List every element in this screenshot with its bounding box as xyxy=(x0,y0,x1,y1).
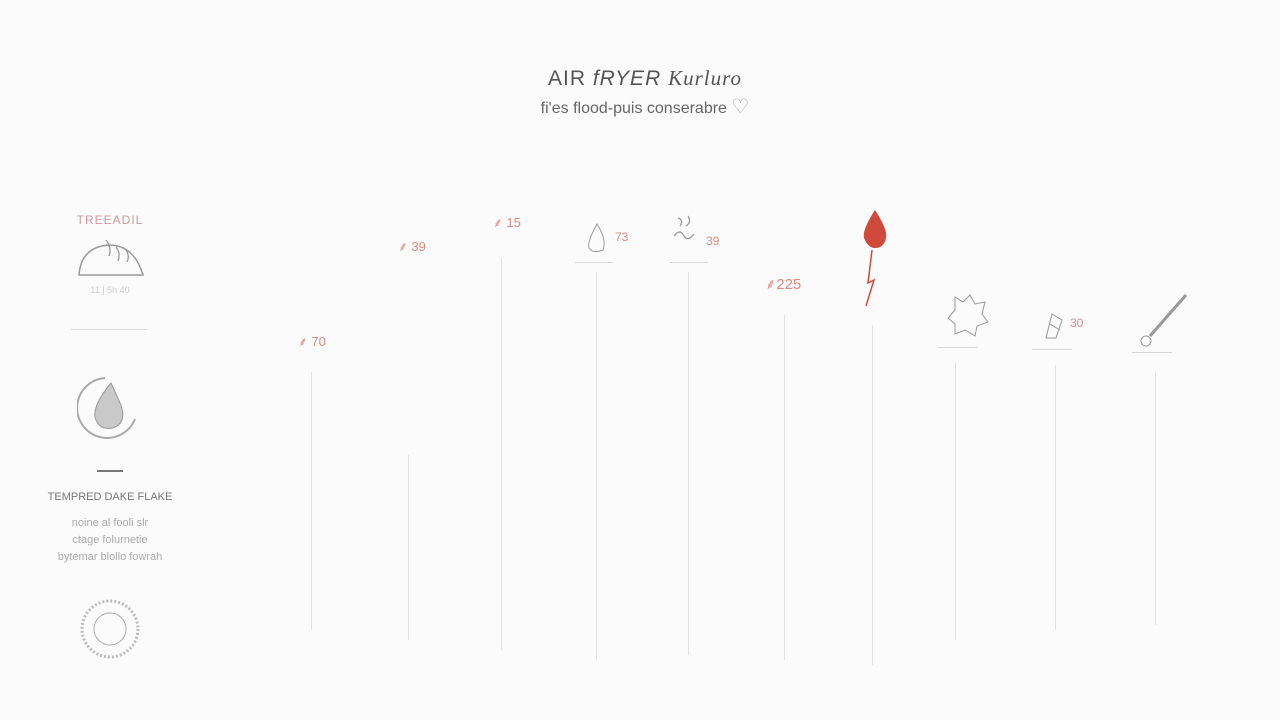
col 6: ⸙225 xyxy=(765,276,801,293)
col 5 xyxy=(674,216,719,248)
col 3: ⸙ 15 xyxy=(493,215,521,230)
left panel xyxy=(48,213,172,658)
caption small: 11 | 5h 40 xyxy=(90,285,130,295)
col 7: red drop xyxy=(864,210,886,306)
col 4: 73 xyxy=(615,230,628,244)
col 2: ⸙ 39 xyxy=(398,239,426,254)
icon: bread xyxy=(78,240,144,276)
col 10: brush xyxy=(1140,294,1187,346)
col 1: ⸙ 70 xyxy=(298,334,326,349)
icon: drop in circle xyxy=(77,377,136,439)
col 9 xyxy=(1045,313,1083,338)
chart: columns xyxy=(298,210,1187,665)
col 5: 39 xyxy=(706,234,719,248)
icon: seal xyxy=(80,600,140,658)
text block: bytemar blollo fowrah xyxy=(58,551,162,563)
text block: ctage folurnetie xyxy=(72,534,148,546)
heading: TEMPRED DAKE FLAKE xyxy=(48,491,172,503)
text block: noine al fooli slr xyxy=(72,517,148,529)
title xyxy=(540,66,749,118)
col 9: 30 xyxy=(1070,316,1083,330)
col 8 xyxy=(947,294,989,337)
heading: left: TREEADIL xyxy=(77,213,143,227)
title: AIR fRYER Kurluro xyxy=(548,66,742,90)
text block xyxy=(58,517,162,563)
title: fi'es flood-puis conserabre ♡ xyxy=(541,96,749,118)
col 4 xyxy=(588,223,628,252)
